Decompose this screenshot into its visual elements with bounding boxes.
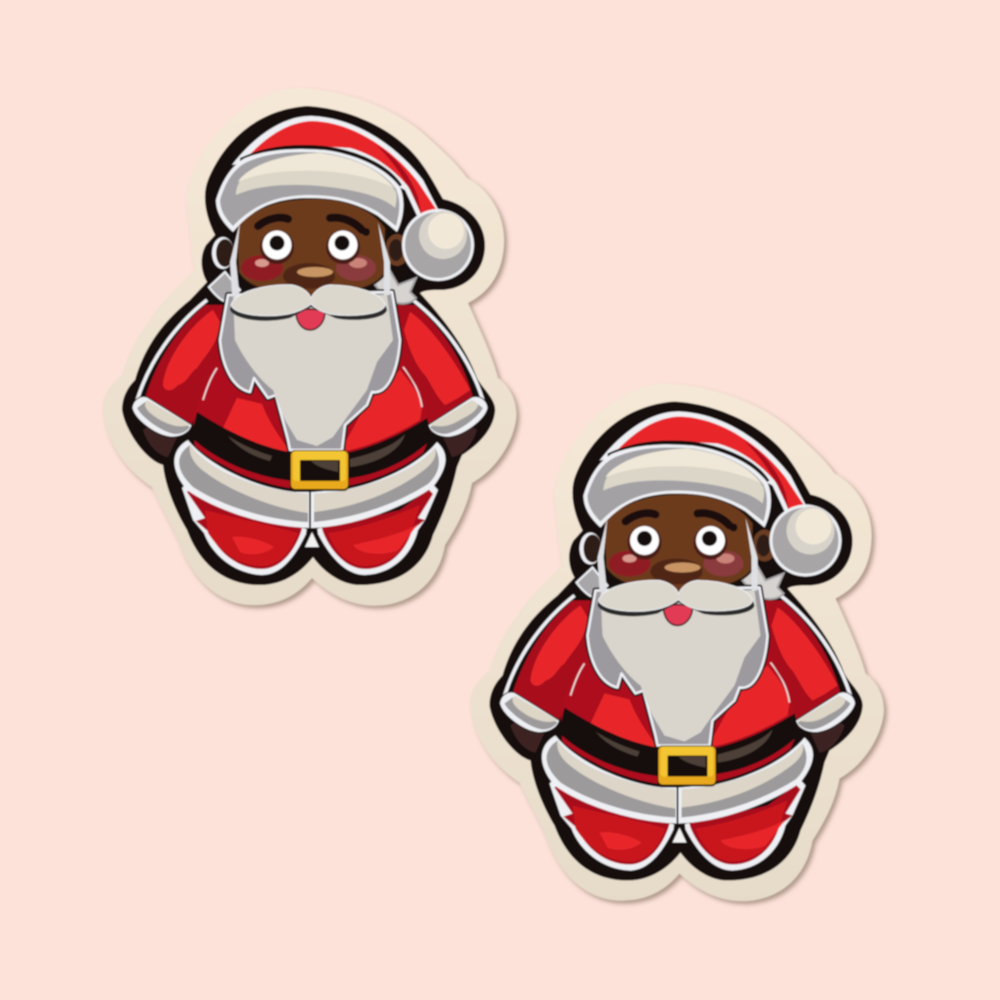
left arm xyxy=(136,300,235,424)
eyebrows xyxy=(258,218,362,230)
legs xyxy=(182,470,438,575)
hat fur band xyxy=(216,145,403,232)
sticker: right Santa xyxy=(470,384,887,904)
cream sticker backing xyxy=(103,88,516,606)
coat torso xyxy=(190,340,435,490)
face xyxy=(236,198,386,296)
black outline xyxy=(122,106,495,585)
sticker: left Santa xyxy=(103,88,519,609)
left hand xyxy=(143,425,178,457)
hat red xyxy=(232,116,440,222)
belt buckle xyxy=(290,450,349,491)
belt xyxy=(191,412,433,481)
tongue xyxy=(296,309,325,330)
fur trim of coat xyxy=(174,437,446,532)
right hand xyxy=(442,425,477,457)
eyes xyxy=(260,230,360,264)
sticker shadow xyxy=(106,91,519,609)
left cuff xyxy=(132,397,192,437)
coat bright patches xyxy=(223,398,290,452)
pompom xyxy=(402,209,474,281)
coat crease lines xyxy=(203,367,422,407)
right arm xyxy=(390,300,484,424)
cheeks xyxy=(241,255,376,281)
hair sides xyxy=(230,222,390,300)
moustache xyxy=(230,285,387,321)
side hair tufts xyxy=(209,262,416,304)
wrinkle mark xyxy=(362,228,370,236)
nose xyxy=(283,263,335,289)
ears xyxy=(212,234,409,269)
right cuff xyxy=(428,397,488,437)
beard xyxy=(220,292,400,450)
